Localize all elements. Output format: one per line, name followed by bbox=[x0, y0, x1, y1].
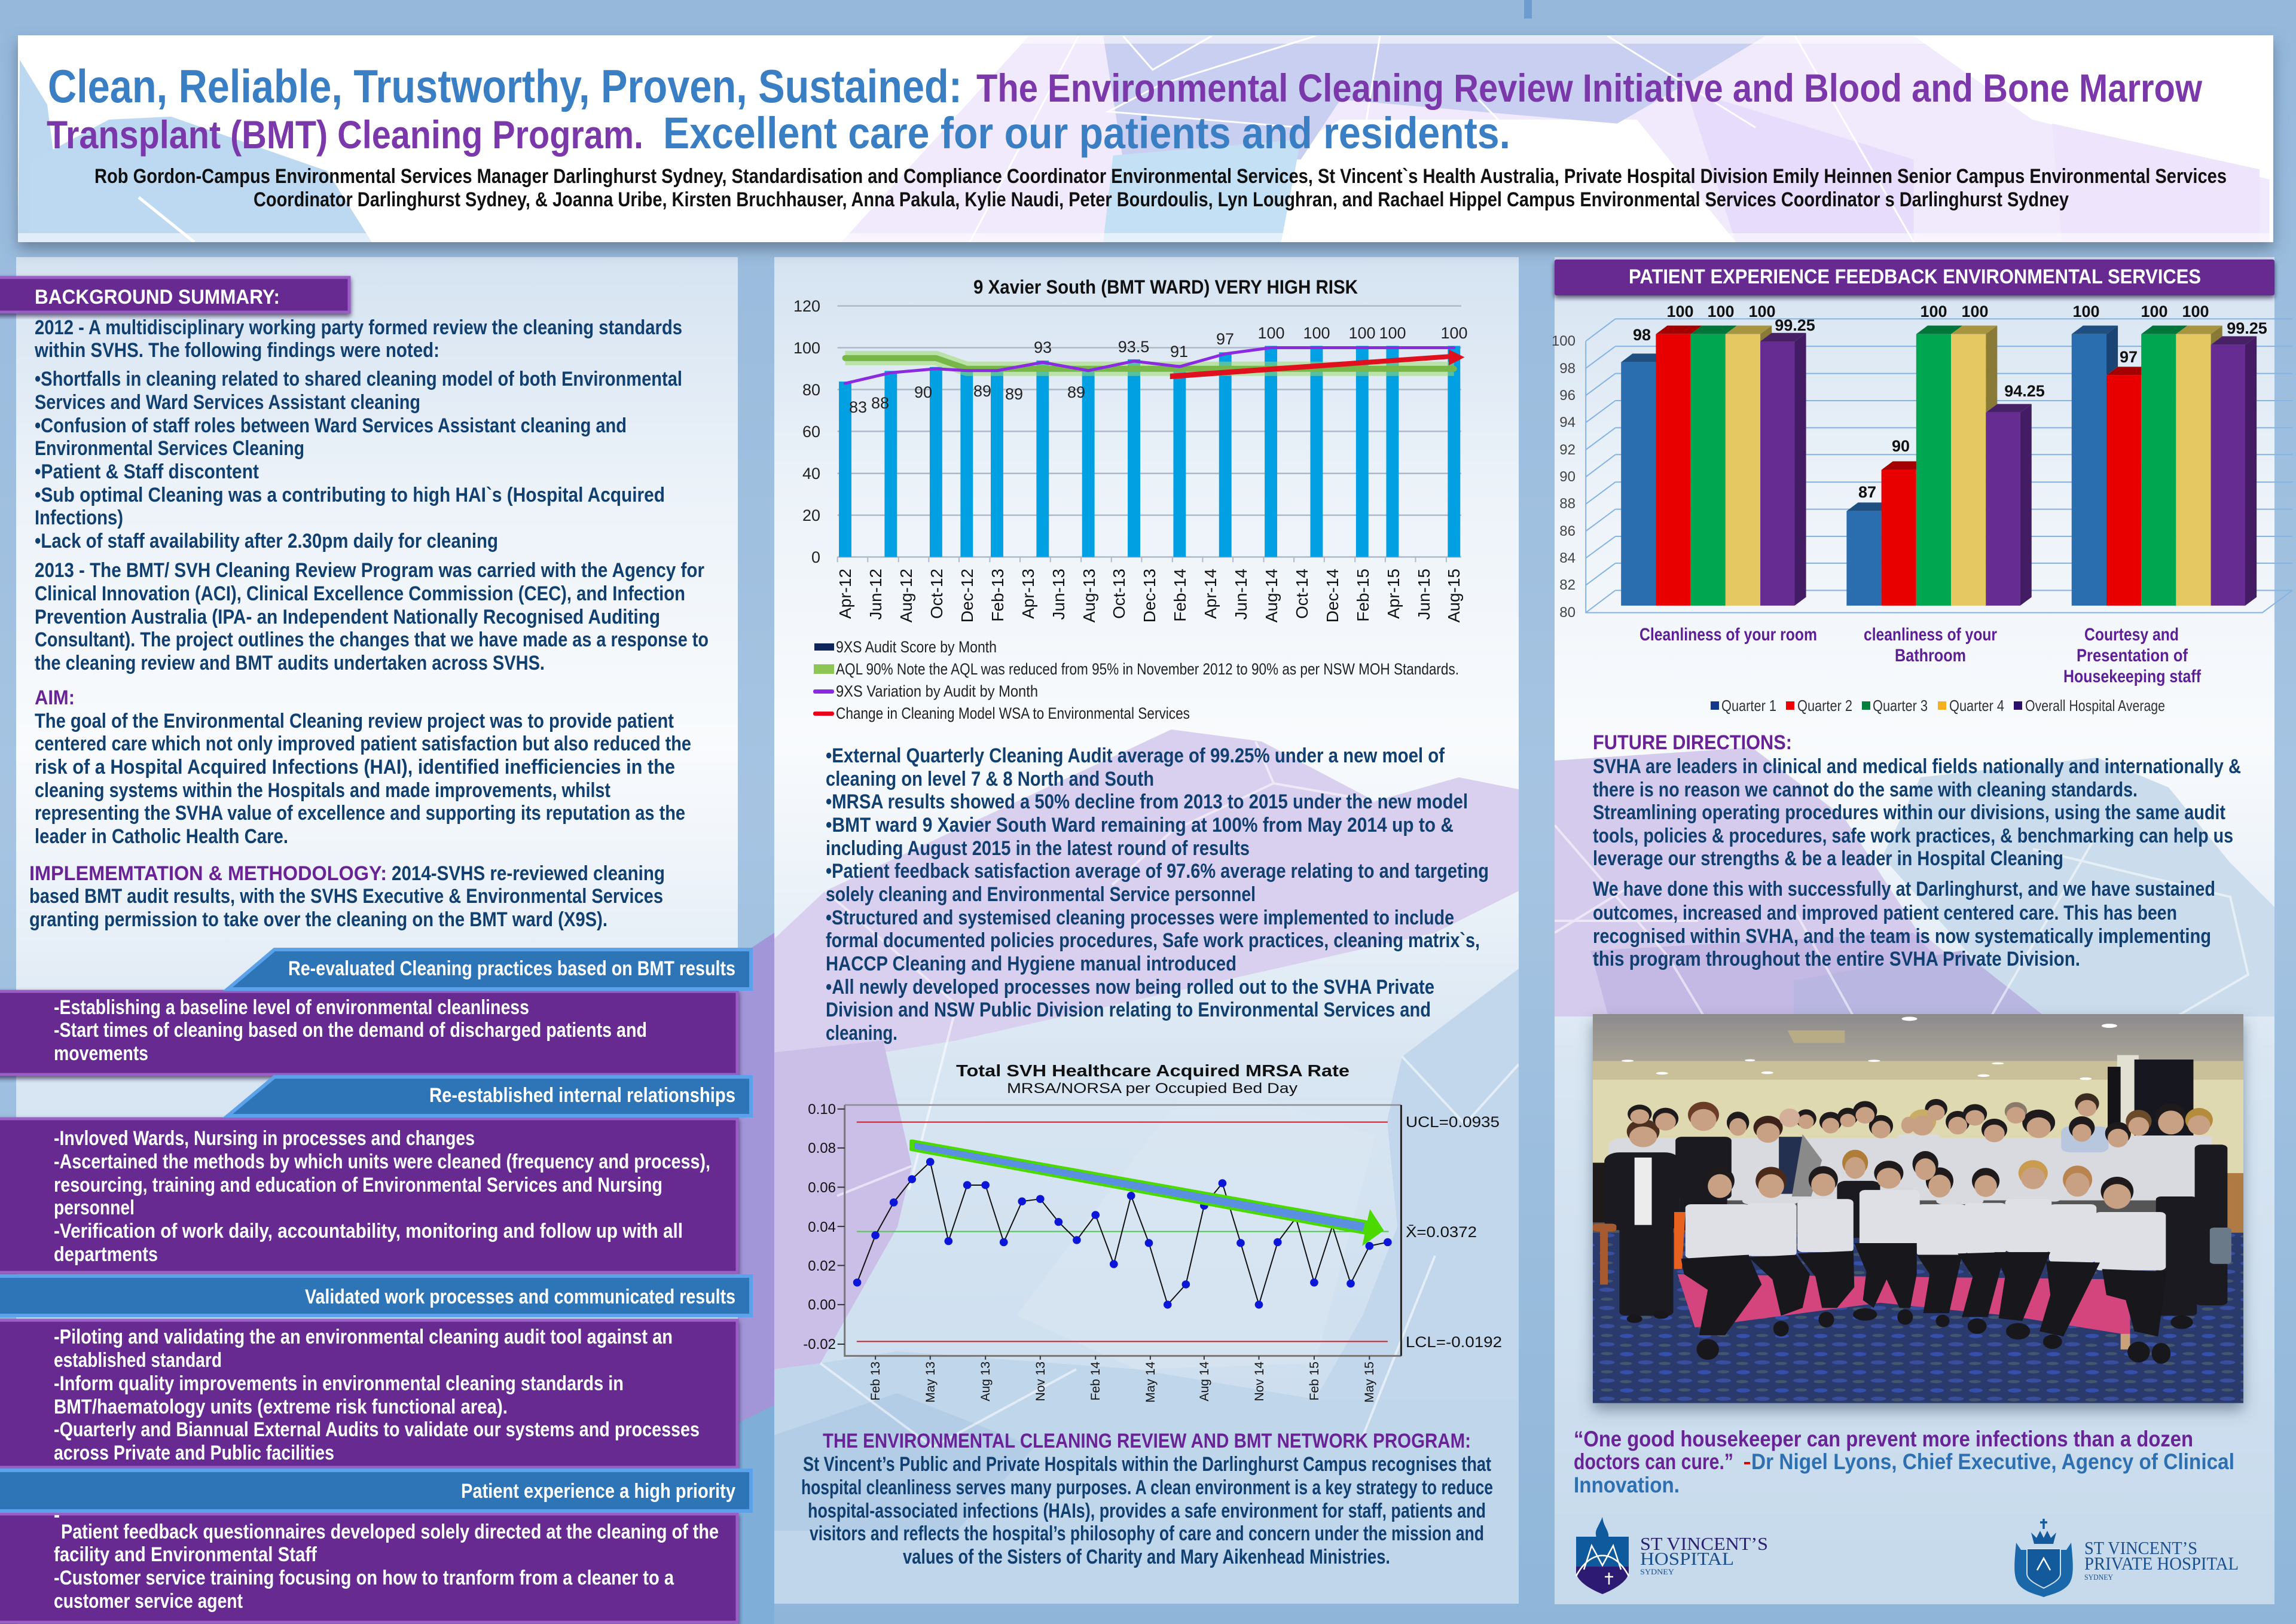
quote bbox=[1574, 1427, 2234, 1497]
purple box 2: -Invloved Wards, Nursing in processes and changes bbox=[54, 1127, 475, 1150]
purple box 1: -Start times of cleaning based on the demand of discharged patients and bbox=[54, 1019, 647, 1042]
chart: MRSA rate control chart bbox=[803, 1061, 1502, 1403]
data labels: 97 bbox=[2120, 348, 2138, 366]
purple box 2: resourcing, training and education of Environmental Services and Nursing bbox=[54, 1174, 662, 1196]
data labels: 83 bbox=[849, 398, 867, 416]
category labels: Bathroom bbox=[1895, 646, 1966, 666]
data labels: 90 bbox=[1892, 437, 1910, 455]
data labels: 100 bbox=[1748, 303, 1776, 320]
category labels: Housekeeping staff bbox=[2063, 667, 2202, 686]
text block: implementation and methodology: based BMT audit results, with the SVHS Executive & Environmental Services bbox=[29, 885, 663, 908]
data labels: 100 bbox=[2072, 303, 2100, 320]
category labels: cleanliness of your bbox=[1864, 625, 1997, 645]
logo: St Vincent's Private Hospital: PRIVATE HOSPITAL bbox=[2084, 1553, 2239, 1574]
logo: St Vincent's Hospital: HOSPITAL bbox=[1640, 1548, 1734, 1569]
x axis labels: Feb-14 bbox=[1171, 569, 1189, 622]
y axis labels: 86 bbox=[1559, 523, 1576, 539]
x axis labels: Apr-15 bbox=[1384, 569, 1403, 619]
x axis labels: Aug-13 bbox=[1080, 569, 1098, 622]
MRSA y axis labels: -0.02 bbox=[803, 1336, 836, 1353]
text block: implementation and methodology: IMPLEMEMTATION & METHODOLOGY: bbox=[29, 862, 387, 885]
data labels bbox=[849, 324, 1468, 416]
x axis labels: Jun-13 bbox=[1049, 569, 1068, 620]
text block: network program: hospital cleanliness serves many purposes. A clean environment is a key strategy to reduce bbox=[801, 1476, 1493, 1499]
text block: future directions: leverage our strengths & be a leader in Hospital Cleaning bbox=[1593, 847, 2063, 870]
text block: outcome bullets bbox=[826, 744, 1489, 1045]
text block: background summary: within SVHS. The following findings were noted: bbox=[34, 339, 439, 362]
data labels: 88 bbox=[871, 394, 889, 412]
x axis labels: Aug-14 bbox=[1262, 569, 1281, 622]
blue tab 3: Validated work processes and communicated results bbox=[305, 1286, 735, 1308]
x axis labels: Dec-13 bbox=[1140, 569, 1159, 622]
y axis labels: 20 bbox=[802, 506, 820, 524]
category labels: Cleanliness of your room bbox=[1639, 625, 1817, 645]
data labels: 87 bbox=[1858, 483, 1876, 501]
purple box 4: customer service agent bbox=[54, 1590, 243, 1613]
purple box 3: BMT/haematology units (extreme risk functional area). bbox=[54, 1396, 508, 1418]
data labels: 89 bbox=[973, 382, 991, 400]
x axis labels: Jun-12 bbox=[866, 569, 885, 620]
text block: future directions: there is no reason we cannot do the same with cleaning standards. bbox=[1593, 779, 2138, 801]
y axis labels: 92 bbox=[1559, 442, 1576, 458]
purple box 2 bbox=[0, 1119, 737, 1272]
panel: left column background bbox=[16, 257, 738, 1624]
x axis labels: Apr-14 bbox=[1201, 569, 1220, 619]
y axis labels: 60 bbox=[802, 423, 820, 441]
text block: background summary: Prevention Australia (IPA- an Independent Nationally Recognised Auditing bbox=[35, 606, 660, 628]
purple box 2: personnel bbox=[54, 1196, 135, 1219]
panel: middle column background bbox=[774, 257, 1519, 1604]
title line one blue: Clean, Reliable, Trustworthy, Proven, Sustained: bbox=[48, 60, 962, 112]
y axis labels: 120 bbox=[793, 297, 820, 315]
MRSA y axis labels bbox=[803, 1101, 836, 1353]
purple box 3: -Quarterly and Biannual External Audits to validate our systems and processes bbox=[54, 1418, 700, 1441]
MRSA control limit labels: X̄=0.0372 bbox=[1406, 1224, 1477, 1241]
blue tab 4 bbox=[0, 1470, 751, 1511]
quote: “One good housekeeper can prevent more infections than a dozen bbox=[1574, 1427, 2193, 1451]
category labels bbox=[1639, 625, 2202, 686]
MRSA y axis labels: 0.00 bbox=[808, 1297, 836, 1313]
logo: St Vincent's Hospital: SYDNEY bbox=[1640, 1567, 1675, 1576]
purple box 4: Patient feedback questionnaires developed solely directed at the cleaning of the bbox=[61, 1521, 719, 1543]
text block: background summary: •Shortfalls in cleaning related to shared cleaning model of both Environmental bbox=[35, 368, 682, 390]
data labels: 100 bbox=[1920, 303, 1947, 320]
MRSA x axis labels: Nov 14 bbox=[1253, 1362, 1266, 1402]
y axis labels: 100 bbox=[1552, 333, 1576, 349]
heading: patient experience feedback bbox=[1555, 260, 2274, 295]
purple box 2: -Ascertained the methods by which units were cleaned (frequency and process), bbox=[54, 1150, 710, 1173]
text block: background summary: •Lack of staff availability after 2.30pm daily for cleaning bbox=[35, 530, 498, 552]
text block: network program bbox=[801, 1430, 1493, 1568]
data labels: 100 bbox=[1348, 324, 1376, 342]
quote: Dr Nigel Lyons, Chief Executive, Agency of Clinical bbox=[1751, 1449, 2234, 1474]
chart legend: AQL 90% Note the AQL was reduced from 95% in November 2012 to 90% as per NSW MOH Standards. bbox=[836, 660, 1459, 678]
heading: background summary bbox=[0, 277, 349, 312]
purple box 1 bbox=[0, 991, 737, 1074]
x axis labels: Dec-14 bbox=[1323, 569, 1342, 622]
text block: aim: risk of a Hospital Acquired Infections (HAI), identified inefficiencies in the bbox=[35, 756, 675, 779]
text block: outcome bullets: •All newly developed processes now being rolled out to the SVHA Private bbox=[826, 976, 1434, 999]
data labels: 93.5 bbox=[1118, 338, 1149, 356]
purple box 4: -Customer service training focusing on how to tranform from a cleaner to a bbox=[54, 1567, 674, 1589]
y axis labels: 0 bbox=[811, 548, 820, 566]
x axis labels: Oct-14 bbox=[1293, 569, 1311, 619]
logo: St Vincent's Hospital: ST VINCENT’S bbox=[1640, 1533, 1768, 1554]
x axis labels bbox=[836, 569, 1463, 622]
MRSA x axis labels: Feb 15 bbox=[1308, 1362, 1321, 1400]
icon: crest bbox=[2014, 1519, 2073, 1597]
text block: outcome bullets: cleaning. bbox=[826, 1022, 897, 1045]
text block: background summary bbox=[34, 316, 709, 674]
x axis labels: Dec-12 bbox=[958, 569, 976, 622]
purple box 1: -Establishing a baseline level of environmental cleanliness bbox=[54, 996, 529, 1019]
quote: Innovation. bbox=[1574, 1473, 1680, 1497]
text block: outcome bullets: including August 2015 in the latest round of results bbox=[826, 837, 1250, 860]
text block: network program: St Vincent’s Public and Private Hospitals within the Darlinghurst Campus recognises that bbox=[803, 1453, 1491, 1476]
data labels: 100 bbox=[1257, 324, 1285, 342]
legend bbox=[1711, 697, 2165, 715]
text block: background summary: Consultant). The project outlines the changes that we have made as a response to bbox=[35, 628, 709, 651]
text block: background summary: Services and Ward Services Assistant cleaning bbox=[35, 391, 420, 414]
blue tab 3 bbox=[0, 1276, 751, 1315]
MRSA x axis labels: Aug 14 bbox=[1198, 1362, 1211, 1402]
text block: aim: centered care which not only improved patient satisfaction but also reduced the bbox=[35, 732, 691, 755]
MRSA x axis labels: May 14 bbox=[1144, 1362, 1158, 1403]
MRSA x axis labels: Feb 14 bbox=[1089, 1362, 1103, 1400]
text block: background summary: 2013 - The BMT/ SVH Cleaning Review Program was carried with the Agency for bbox=[35, 559, 704, 582]
data labels: 89 bbox=[1005, 385, 1023, 403]
data labels: 90 bbox=[914, 383, 932, 401]
logo: St Vincent's Private Hospital: ST VINCENT’S bbox=[2084, 1537, 2197, 1558]
text block: background summary: •Confusion of staff roles between Ward Services Assistant cleaning and bbox=[35, 414, 627, 437]
data labels: 100 bbox=[2141, 303, 2168, 320]
text block: outcome bullets: HACCP Cleaning and Hygiene manual introduced bbox=[826, 953, 1236, 975]
purple box 3: -Piloting and validating the an environmental cleaning audit tool against an bbox=[54, 1326, 673, 1348]
blue tab 1 bbox=[228, 950, 751, 989]
data labels: 99.25 bbox=[1775, 316, 1815, 334]
purple box 2: -Verification of work daily, accountability, monitoring and follow up with all bbox=[54, 1220, 683, 1243]
chart legend bbox=[813, 638, 1459, 722]
x axis labels: Aug-15 bbox=[1445, 569, 1463, 622]
text block: implementation and methodology: granting permission to take over the cleaning on the BMT ward (X9S). bbox=[29, 908, 607, 931]
data labels: 100 bbox=[2182, 303, 2209, 320]
text block: future directions: this program throughout the entire SVHA Private Division. bbox=[1593, 948, 2080, 970]
category labels: Courtesy and bbox=[2084, 625, 2179, 645]
chart legend: 9XS Variation by Audit by Month bbox=[836, 682, 1038, 700]
text block: background summary: •Patient & Staff discontent bbox=[35, 460, 259, 483]
purple box 4: facility and Environmental Staff bbox=[54, 1543, 317, 1566]
y axis labels: 88 bbox=[1559, 496, 1576, 512]
x axis labels: Aug-12 bbox=[897, 569, 915, 622]
blue tab 4: Patient experience a high priority bbox=[461, 1480, 735, 1503]
text block: future directions: FUTURE DIRECTIONS: bbox=[1593, 731, 1792, 754]
photo: environmental services team bbox=[1593, 1014, 2243, 1403]
y axis labels: 94 bbox=[1559, 414, 1576, 431]
icon: shield with flame bbox=[1576, 1517, 1629, 1594]
purple box 4 bbox=[0, 1504, 737, 1622]
text block: future directions: recognised within SVHA, and the team is now systematically implementing bbox=[1593, 925, 2211, 948]
data labels: 100 bbox=[1707, 303, 1735, 320]
data labels: 100 bbox=[1379, 324, 1406, 342]
plot area bbox=[838, 306, 1464, 562]
y axis labels: 40 bbox=[802, 465, 820, 483]
data labels: 99.25 bbox=[2227, 319, 2267, 337]
text block: implementation and methodology bbox=[29, 862, 665, 931]
y axis labels: 82 bbox=[1559, 577, 1576, 593]
bars and walls bbox=[1586, 319, 2292, 613]
title line two blue: Excellent care for our patients and residents. bbox=[663, 108, 1510, 158]
purple box 3 bbox=[0, 1320, 737, 1467]
data labels: 93 bbox=[1034, 338, 1052, 356]
legend: Overall Hospital Average bbox=[2025, 697, 2165, 715]
chart legend: 9XS Audit Score by Month bbox=[836, 638, 997, 656]
authors bbox=[94, 165, 2227, 211]
y axis labels: 80 bbox=[1559, 605, 1576, 621]
text block: aim: leader in Catholic Health Care. bbox=[35, 825, 288, 848]
data labels: 100 bbox=[1440, 324, 1468, 342]
data labels: 98 bbox=[1633, 326, 1651, 344]
MRSA x axis labels bbox=[869, 1362, 1376, 1403]
chart title: 9 Xavier South (BMT WARD) VERY HIGH RISK bbox=[973, 276, 1358, 298]
y axis labels: 80 bbox=[802, 381, 820, 399]
y axis labels bbox=[1552, 333, 1576, 621]
text block: future directions bbox=[1593, 731, 2241, 970]
text block: outcome bullets: •Patient feedback satisfaction average of 97.6% average relating to and targeting bbox=[826, 860, 1489, 883]
MRSA chart subtitle: MRSA/NORSA per Occupied Bed Day bbox=[1007, 1080, 1297, 1097]
text block: outcome bullets: •MRSA results showed a 50% decline from 2013 to 2015 under the new model bbox=[826, 790, 1468, 813]
purple box 3: established standard bbox=[54, 1349, 222, 1372]
text block: future directions: outcomes, increased and improved patient centered care. This has been bbox=[1593, 902, 2177, 924]
data labels bbox=[1633, 303, 2267, 501]
MRSA control limit labels bbox=[1406, 1114, 1502, 1351]
y axis labels: 98 bbox=[1559, 361, 1576, 377]
heading: background summary: BACKGROUND SUMMARY: bbox=[35, 286, 280, 309]
legend: Quarter 2 bbox=[1797, 697, 1852, 715]
MRSA x axis labels: Feb 13 bbox=[869, 1362, 883, 1400]
blue tab 2: Re-established internal relationships bbox=[429, 1084, 735, 1107]
text block: background summary: 2012 - A multidisciplinary working party formed review the cleaning standards bbox=[35, 316, 682, 339]
purple box 3: across Private and Public facilities bbox=[54, 1442, 334, 1464]
x axis labels: Feb-13 bbox=[988, 569, 1007, 622]
purple box 1: movements bbox=[54, 1042, 148, 1065]
text block: background summary: the cleaning review and BMT audits undertaken across SVHS. bbox=[35, 652, 545, 674]
MRSA x axis labels: Aug 13 bbox=[979, 1362, 993, 1402]
text block: background summary: Infections) bbox=[35, 506, 123, 529]
quote: doctors can cure.” bbox=[1574, 1449, 1733, 1474]
text block: aim: The goal of the Environmental Cleaning review project was to provide patient bbox=[35, 710, 674, 732]
MRSA y axis labels: 0.06 bbox=[808, 1180, 836, 1196]
data labels: 89 bbox=[1067, 383, 1085, 401]
legend: Quarter 4 bbox=[1949, 697, 2004, 715]
text block: network program: hospital-associated infections (HAIs), provides a safe environment for staff, patients and bbox=[808, 1500, 1486, 1522]
x axis labels: Feb-15 bbox=[1354, 569, 1372, 622]
MRSA y axis labels: 0.10 bbox=[808, 1101, 836, 1118]
y axis labels: 84 bbox=[1559, 550, 1576, 566]
data labels: 91 bbox=[1170, 343, 1188, 361]
text block: outcome bullets: formal documented policies procedures, Safe work practices, cleaning matrix`s, bbox=[826, 929, 1480, 952]
text block: network program: THE ENVIRONMENTAL CLEANING REVIEW AND BMT NETWORK PROGRAM: bbox=[823, 1430, 1471, 1452]
text block: network program: visitors and reflects the hospital’s philosophy of care and concern under the mission and bbox=[810, 1522, 1484, 1545]
MRSA y axis labels: 0.08 bbox=[808, 1140, 836, 1156]
y axis labels: 100 bbox=[793, 339, 820, 357]
chart: 9 Xavier South audit scores bbox=[793, 276, 1468, 722]
heading: patient experience feedback: PATIENT EXPERIENCE FEEDBACK ENVIRONMENTAL SERVICES bbox=[1629, 265, 2201, 288]
panel: right column background bbox=[1555, 257, 2274, 1604]
text block: outcome bullets: solely cleaning and Environmental Service personnel bbox=[826, 883, 1256, 906]
header panel bbox=[18, 35, 2273, 242]
blue tab 1: Re-evaluated Cleaning practices based on BMT results bbox=[288, 957, 735, 980]
chart: patient feedback 3D bars bbox=[1552, 303, 2292, 715]
MRSA chart title: Total SVH Healthcare Acquired MRSA Rate bbox=[956, 1061, 1349, 1080]
y axis labels: 96 bbox=[1559, 387, 1576, 404]
MRSA x axis labels: May 15 bbox=[1363, 1362, 1376, 1403]
x axis labels: Jun-15 bbox=[1415, 569, 1433, 620]
x axis labels: Jun-14 bbox=[1232, 569, 1250, 620]
MRSA x axis labels: Nov 13 bbox=[1034, 1362, 1048, 1402]
MRSA y axis labels: 0.02 bbox=[808, 1258, 836, 1274]
x axis labels: Apr-13 bbox=[1019, 569, 1037, 619]
logo: St Vincent's Private Hospital: SYDNEY bbox=[2084, 1573, 2114, 1582]
category labels: Presentation of bbox=[2077, 646, 2188, 666]
text block: outcome bullets: •External Quarterly Cleaning Audit average of 99.25% under a new moel of bbox=[826, 744, 1445, 767]
text block: outcome bullets: Division and NSW Public Division relating to Environmental Services and bbox=[826, 999, 1431, 1021]
text block: aim: representing the SVHA value of excellence and supporting its reputation as the bbox=[35, 802, 685, 825]
text block: aim bbox=[35, 686, 691, 848]
text block: implementation and methodology: 2014-SVHS re-reviewed cleaning bbox=[392, 862, 665, 885]
text block: aim: AIM: bbox=[35, 686, 75, 709]
blue tab 2 bbox=[228, 1077, 751, 1116]
MRSA plot bbox=[838, 1105, 1401, 1360]
MRSA control limit labels: LCL=-0.0192 bbox=[1406, 1334, 1502, 1351]
chart legend: Change in Cleaning Model WSA to Environmental Services bbox=[836, 704, 1190, 722]
data labels: 94.25 bbox=[2004, 382, 2045, 400]
logo: St Vincent's Hospital bbox=[1576, 1517, 1768, 1594]
data labels: 97 bbox=[1216, 330, 1234, 348]
MRSA y axis labels: 0.04 bbox=[808, 1219, 836, 1235]
purple box 2: departments bbox=[54, 1243, 158, 1266]
data labels: 100 bbox=[1303, 324, 1330, 342]
y axis labels: 90 bbox=[1559, 469, 1576, 485]
title line two purple: Transplant (BMT) Cleaning Program. bbox=[47, 112, 643, 157]
data labels: 100 bbox=[1666, 303, 1694, 320]
purple box 3: -Inform quality improvements in environmental cleaning standards in bbox=[54, 1372, 624, 1395]
text block: background summary: Clinical Innovation (ACI), Clinical Excellence Commission (CEC), and Infection bbox=[35, 582, 685, 605]
text block: network program: values of the Sisters of Charity and Mary Aikenhead Ministries. bbox=[903, 1546, 1390, 1568]
MRSA x axis labels: May 13 bbox=[924, 1362, 938, 1403]
text block: background summary: Environmental Services Cleaning bbox=[35, 437, 304, 460]
x axis labels: Apr-12 bbox=[836, 569, 854, 619]
text block: outcome bullets: •Structured and systemised cleaning processes were implemented to include bbox=[826, 906, 1454, 929]
text block: background summary: •Sub optimal Cleaning was a contributing to high HAI`s (Hospital Acquired bbox=[35, 484, 665, 506]
text block: outcome bullets: cleaning on level 7 & 8 North and South bbox=[826, 768, 1154, 790]
logo: St Vincent's Private Hospital bbox=[2014, 1519, 2239, 1597]
legend: Quarter 1 bbox=[1721, 697, 1776, 715]
MRSA control limit labels: UCL=0.0935 bbox=[1406, 1114, 1500, 1131]
legend: Quarter 3 bbox=[1873, 697, 1928, 715]
y axis labels bbox=[793, 297, 820, 566]
x axis labels: Oct-13 bbox=[1110, 569, 1128, 619]
text block: aim: cleaning systems within the Hospitals and made improvements, whilst bbox=[35, 779, 610, 802]
data labels: 100 bbox=[1961, 303, 1989, 320]
purple box 4: - bbox=[54, 1504, 60, 1527]
text block: outcome bullets: •BMT ward 9 Xavier South Ward remaining at 100% from May 2014 up to & bbox=[826, 814, 1454, 837]
x axis labels: Oct-12 bbox=[927, 569, 946, 619]
